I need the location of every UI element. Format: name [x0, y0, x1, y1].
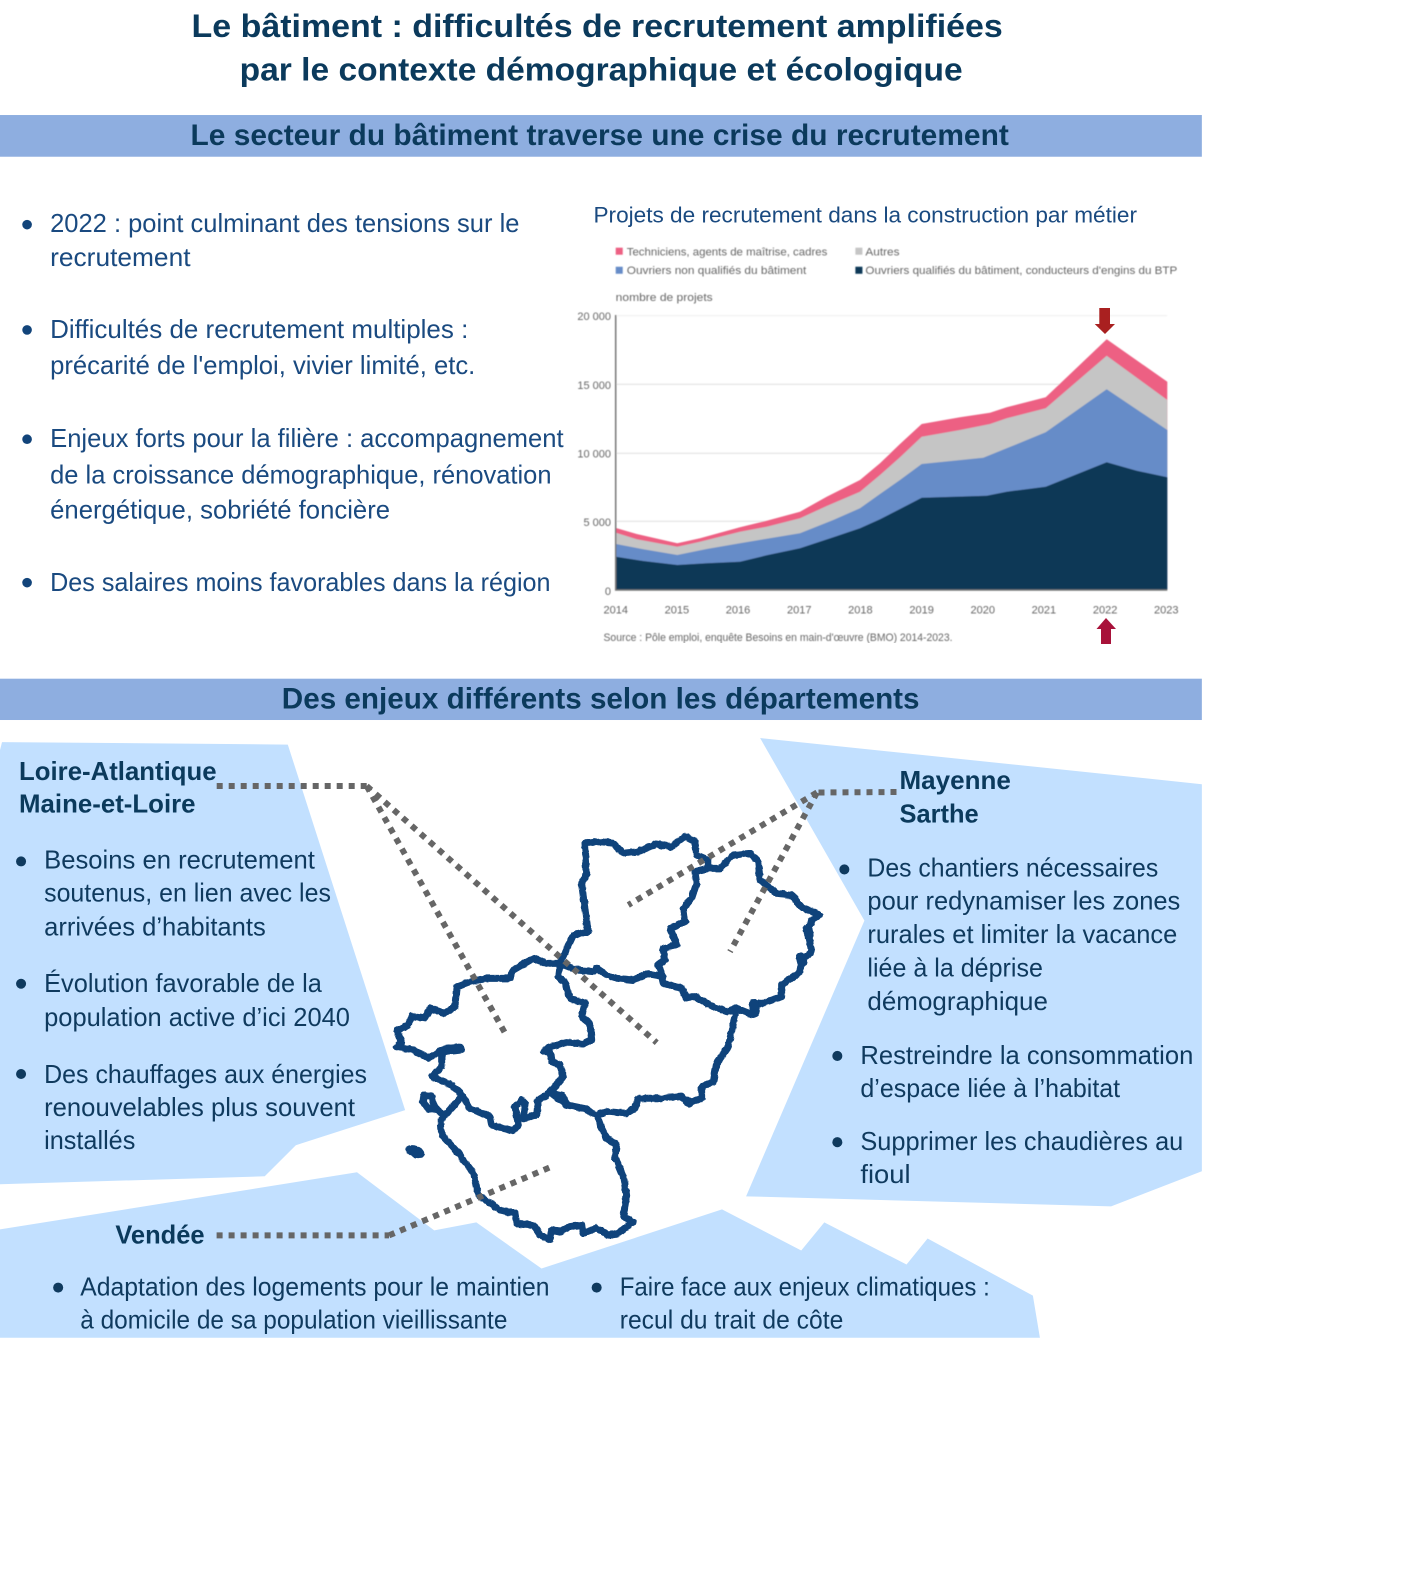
bullet list: crise du recrutement: [22, 210, 564, 597]
panel bullets: [16, 846, 367, 1155]
panel bullets: Besoins en recrutement: [44, 846, 315, 874]
bullet list: crise du recrutement: Enjeux forts pour la filière : accompagnement: [50, 425, 564, 453]
île d'Yeu: [404, 1143, 426, 1161]
Loire estuary: [443, 1049, 460, 1051]
panel bullets: Supprimer les chaudières au: [860, 1128, 1183, 1156]
panel heading: Sarthe: [900, 800, 979, 828]
section heading: crise du recrutement: Le secteur du bâtiment traverse une crise du recrutement: [191, 119, 1009, 152]
contour thickenings: [687, 928, 809, 1103]
area chart: projets de recrutement: nombre de projets: [616, 292, 713, 304]
x axis labels: 2018: [848, 605, 873, 617]
title: par le contexte démographique et écologique: [240, 51, 963, 88]
panel bullets: Des chauffages aux énergies: [44, 1061, 367, 1089]
arrow: top 2022 peak: [1095, 308, 1115, 334]
chart legend: Ouvriers non qualifiés du bâtiment: [627, 265, 806, 277]
panel heading: [19, 758, 217, 818]
y axis: 5 000: [583, 517, 611, 529]
panel heading: Mayenne: [900, 767, 1011, 795]
arrow: bottom 2022: [1096, 618, 1116, 644]
area: ouvriers non qualifiés: [616, 389, 1167, 590]
y axis: 15 000: [577, 380, 611, 392]
Noirmoutier outline: [422, 1095, 443, 1117]
x axis labels: [604, 605, 1179, 614]
title: Le bâtiment : difficultés de recrutement amplifiées: [192, 7, 1003, 44]
bullet list: crise du recrutement: recrutement: [50, 244, 191, 272]
y axis: 10 000: [577, 448, 611, 460]
panel bullets: [832, 854, 1193, 1189]
chart legend: Ouvriers qualifiés du bâtiment, conducteurs d'engins du BTP: [865, 265, 1177, 277]
bullet list: crise du recrutement: énergétique, sobriété foncière: [50, 496, 390, 524]
panel heading: Maine-et-Loire: [19, 790, 196, 818]
bullet list: crise du recrutement: Difficultés de recrutement multiples :: [50, 316, 468, 344]
section heading: enjeux départements: Des enjeux différents selon les départements: [282, 682, 920, 715]
chart legend: Techniciens, agents de maîtrise, cadres: [627, 247, 828, 259]
panel bullets: rurales et limiter la vacance: [867, 921, 1177, 949]
bullet list: crise du recrutement: Des salaires moins favorables dans la région: [50, 569, 551, 597]
panel bullets: population active d’ici 2040: [44, 1004, 350, 1032]
bullet list: crise du recrutement: de la croissance démographique, rénovation: [50, 461, 552, 489]
panel heading: [900, 767, 1011, 828]
x axis labels: 2014: [603, 605, 628, 617]
x axis labels: 2022: [1093, 605, 1117, 617]
Mayenne outline: [562, 837, 708, 977]
panel: Vendée: [0, 1172, 1040, 1338]
area chart: projets de recrutement: Source : Pôle emploi, enquête Besoins en main-d'œuvre (BMO) 2014-2023.: [604, 632, 952, 644]
panel bullets: Restreindre la consommation: [860, 1042, 1193, 1070]
panel: Loire-Atlantique, Maine-et-Loire: [0, 742, 405, 1184]
panel bullets: à domicile de sa population vieillissante: [80, 1307, 507, 1335]
panel bullets: renouvelables plus souvent: [44, 1094, 355, 1122]
chart legend: [616, 247, 1177, 277]
y axis: 0: [605, 586, 611, 598]
chart heading: Projets de recrutement dans la construction par métier: [594, 202, 1137, 228]
Maine-et-Loire outline: [552, 963, 737, 1115]
panel bullets: démographique: [867, 988, 1048, 1016]
area: ouvriers qualifiés: [616, 462, 1167, 590]
bullet list: crise du recrutement: précarité de l'emploi, vivier limité, etc.: [50, 352, 475, 380]
x axis labels: 2019: [909, 605, 934, 617]
y axis: [577, 311, 1167, 598]
Loire-Atlantique outline: [397, 958, 592, 1131]
y axis: 20 000: [577, 311, 611, 323]
x axis labels: 2016: [726, 605, 750, 617]
area: autres: [616, 355, 1168, 556]
panel heading: Loire-Atlantique: [19, 758, 217, 786]
map: départements des Pays de la Loire: [397, 837, 820, 1240]
x axis labels: 2020: [970, 605, 995, 617]
dotted leader: Vendée: [217, 1167, 550, 1235]
panel bullets: Faire face aux enjeux climatiques :: [620, 1274, 990, 1302]
panel bullets: fioul: [860, 1161, 911, 1189]
chart legend: Autres: [865, 247, 900, 259]
panel bullets: Adaptation des logements pour le maintien: [80, 1274, 550, 1302]
panel bullets: recul du trait de côte: [620, 1307, 843, 1335]
panel bullets: arrivées d’habitants: [44, 914, 266, 942]
panel bullets: liée à la déprise: [867, 955, 1043, 983]
panel: Mayenne, Sarthe: [746, 738, 1202, 1206]
x axis labels: 2017: [787, 605, 811, 617]
dotted leader: Mayenne, Sarthe: [628, 792, 896, 952]
title: [192, 7, 1003, 88]
panel bullets: Évolution favorable de la: [44, 969, 323, 998]
x axis labels: 2023: [1154, 605, 1179, 617]
dotted leader: Loire-Atlantique, Maine-et-Loire: [217, 786, 657, 1043]
panel bullets: [53, 1274, 990, 1335]
panel heading: Vendée: [115, 1221, 205, 1249]
bullet list: crise du recrutement: 2022 : point culminant des tensions sur le: [50, 210, 519, 238]
Sarthe outline: [708, 853, 820, 1015]
section heading: crise du recrutement: [0, 115, 1202, 157]
Vendée outline: [441, 1098, 633, 1240]
panel bullets: soutenus, en lien avec les: [44, 880, 331, 908]
area: techniciens: [616, 338, 1168, 548]
section heading: enjeux départements: [0, 679, 1202, 720]
panel bullets: Des chantiers nécessaires: [867, 854, 1158, 882]
panel bullets: pour redynamiser les zones: [867, 888, 1180, 916]
panel bullets: d’espace liée à l’habitat: [860, 1075, 1120, 1103]
panel bullets: installés: [44, 1127, 135, 1155]
x axis labels: 2015: [665, 605, 689, 617]
area chart: projets de recrutement: [577, 247, 1179, 644]
x axis labels: 2021: [1032, 605, 1056, 617]
